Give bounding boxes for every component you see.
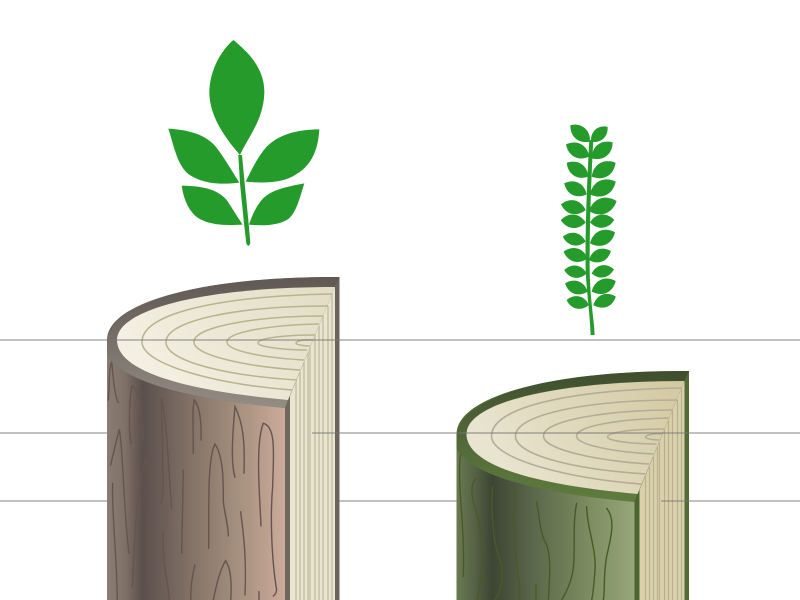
brown log xyxy=(107,277,340,600)
brown log bark xyxy=(107,355,285,600)
green growth rings xyxy=(492,388,682,484)
green log bark xyxy=(456,449,634,600)
brown bark grain lines xyxy=(108,362,277,600)
icon: narrow pinnate sprig xyxy=(559,120,619,335)
brown growth rings xyxy=(142,294,332,390)
green cut side shadow band xyxy=(634,490,640,600)
brown log outer silhouette xyxy=(107,277,340,600)
green bark grain lines xyxy=(460,453,612,600)
horizontal guide lines behind logs xyxy=(0,433,457,501)
green log rim xyxy=(456,371,689,502)
brown cut panel with ring stripes xyxy=(290,287,335,600)
icon: large broad-leaf sprig xyxy=(168,40,319,246)
brown log rim xyxy=(107,277,340,408)
green log outer silhouette xyxy=(456,371,689,600)
brown top face xyxy=(117,287,335,400)
green log xyxy=(456,371,689,600)
green top face xyxy=(466,381,684,494)
brown cut side shadow band xyxy=(285,396,290,600)
green cut panel with ring stripes xyxy=(640,381,684,600)
horizontal guide lines over logs xyxy=(0,340,800,501)
